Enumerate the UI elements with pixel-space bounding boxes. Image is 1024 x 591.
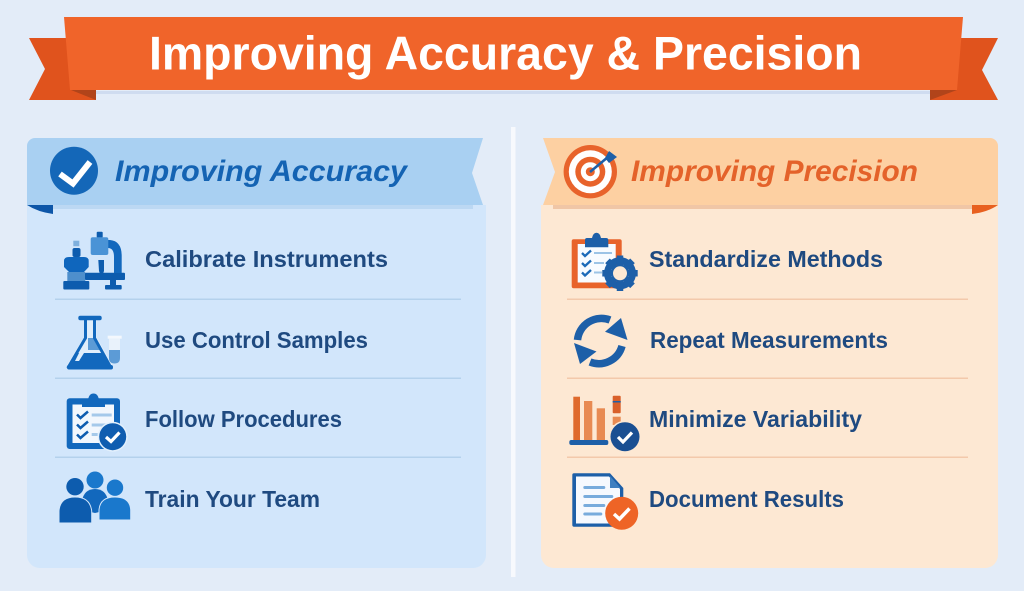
row: minimize variability <box>569 396 862 453</box>
row: follow procedures <box>67 394 342 452</box>
panel: improving precision <box>541 138 998 568</box>
label: minimize variability: Minimize Variability <box>649 406 862 432</box>
icon: check circle <box>50 147 98 195</box>
label: follow procedures: Follow Procedures <box>145 406 342 432</box>
icon: team of people <box>59 472 131 523</box>
panel: improving accuracy <box>27 138 486 568</box>
row: use control samples <box>67 316 368 370</box>
icon: clipboard with check <box>67 394 128 452</box>
label: train your team: Train Your Team <box>145 486 320 512</box>
icon: bar chart with check <box>569 396 641 453</box>
icon: flask and test tube <box>67 316 122 370</box>
icon: calibration instrument <box>63 232 125 290</box>
label: use control samples: Use Control Samples <box>145 327 368 353</box>
label: repeat measurements: Repeat Measurements <box>650 327 888 353</box>
row: calibrate instruments <box>63 232 388 290</box>
icon: clipboard with gear <box>572 233 638 291</box>
row: standardize methods <box>572 233 883 291</box>
label: calibrate instruments: Calibrate Instruments <box>145 246 388 272</box>
heading: improving accuracy: Improving Accuracy <box>115 155 408 188</box>
divider <box>511 127 516 577</box>
row: repeat measurements <box>574 318 888 364</box>
heading ribbon: precision <box>543 138 998 214</box>
title text: Improving Accuracy & Precision <box>149 26 862 80</box>
label: document results: Document Results <box>649 486 844 512</box>
row: document results <box>572 473 844 530</box>
row: train your team <box>59 472 320 523</box>
icon: circular arrows <box>574 318 628 364</box>
title banner <box>29 17 998 100</box>
label: standardize methods: Standardize Methods <box>649 246 883 272</box>
heading ribbon: accuracy <box>27 138 483 214</box>
icon: document with check <box>572 473 638 530</box>
heading: improving precision: Improving Precision <box>631 155 918 188</box>
icon: target with dart <box>564 145 617 198</box>
